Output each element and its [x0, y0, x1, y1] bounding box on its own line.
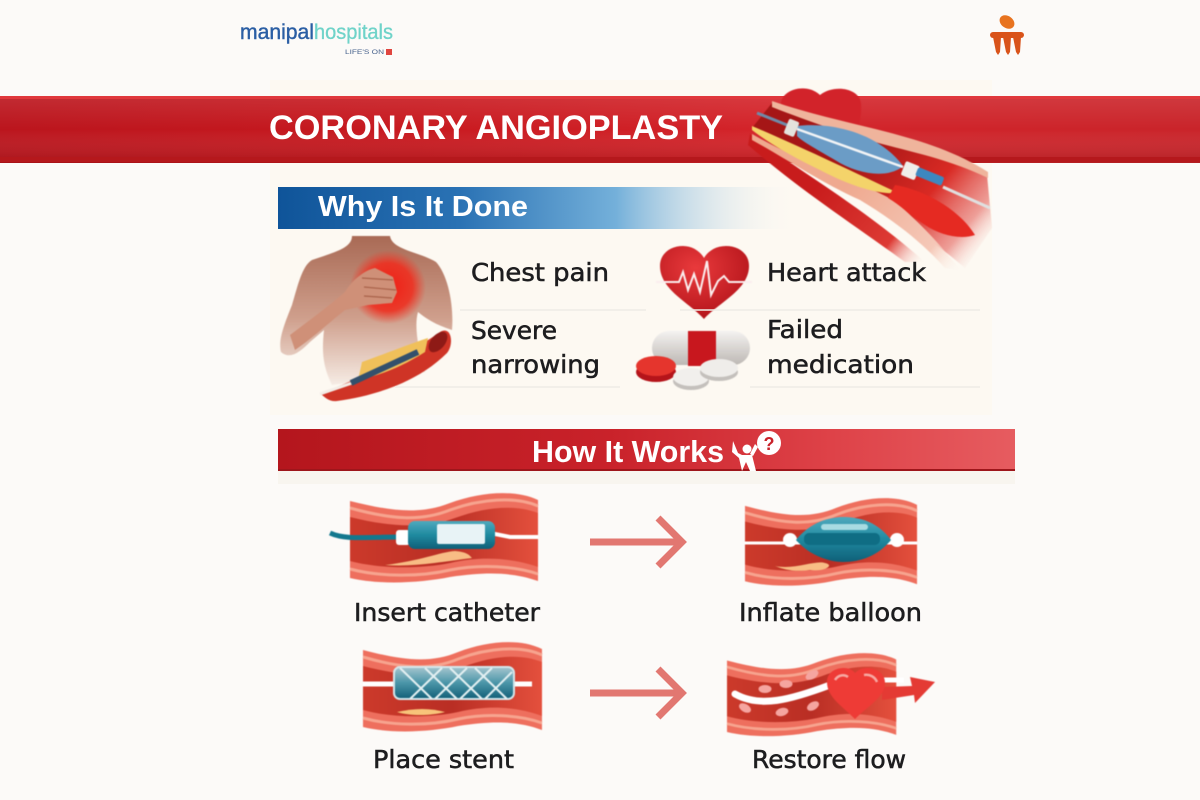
section heading: how it works [278, 429, 1015, 484]
text: heart attack: Heart attack [767, 258, 927, 287]
step 4: restore flow [727, 653, 935, 736]
step 2: inflate balloon [745, 498, 917, 586]
illustration: artery with balloon stent [748, 88, 992, 270]
logo: manipal hospitals [240, 21, 393, 56]
title: CORONARY ANGIOPLASTY [269, 109, 723, 147]
logo: orange emblem [990, 12, 1024, 55]
logo: manipal hospitals: manipal [240, 21, 314, 44]
text: severe narrowing: Severe [471, 316, 557, 345]
balloon [797, 125, 903, 174]
label: inflate balloon: Inflate balloon [739, 598, 922, 627]
text: failed medication: Failed [767, 315, 843, 344]
text: failed medication: medication [767, 350, 914, 379]
text: chest pain: Chest pain [471, 258, 609, 287]
section heading: why is it done [278, 187, 798, 229]
icon: person with question bubble [732, 431, 781, 471]
text: severe narrowing: narrowing [471, 350, 600, 379]
label: insert catheter: Insert catheter [354, 598, 541, 627]
logo: manipal hospitals: hospitals [314, 21, 393, 44]
divider [460, 309, 980, 311]
label: restore flow: Restore flow [752, 745, 906, 774]
step 3: place stent [363, 642, 542, 731]
text: failed medication [767, 315, 914, 379]
icon: person with question bubble: ? [764, 434, 774, 454]
step 1: insert catheter [330, 493, 538, 582]
section heading: how it works: How It Works [532, 434, 724, 469]
small artery with stent [320, 331, 451, 401]
title banner [0, 96, 1200, 163]
label: place stent: Place stent [373, 745, 514, 774]
heart behind artery [781, 88, 861, 135]
icon: pills [636, 331, 750, 390]
logo: manipal hospitals: LIFE'S ON [345, 49, 384, 56]
divider [395, 386, 980, 388]
illustration: man with chest pain [280, 236, 452, 401]
section heading: why is it done: Why Is It Done [318, 191, 528, 223]
arrow: step 3 to 4 [590, 669, 682, 717]
arm and hand [290, 268, 397, 350]
text: severe narrowing [471, 316, 600, 379]
panel: infographic cream card [270, 80, 992, 415]
icon: heart with ECG [656, 246, 752, 319]
arrow: step 1 to 2 [590, 518, 682, 566]
